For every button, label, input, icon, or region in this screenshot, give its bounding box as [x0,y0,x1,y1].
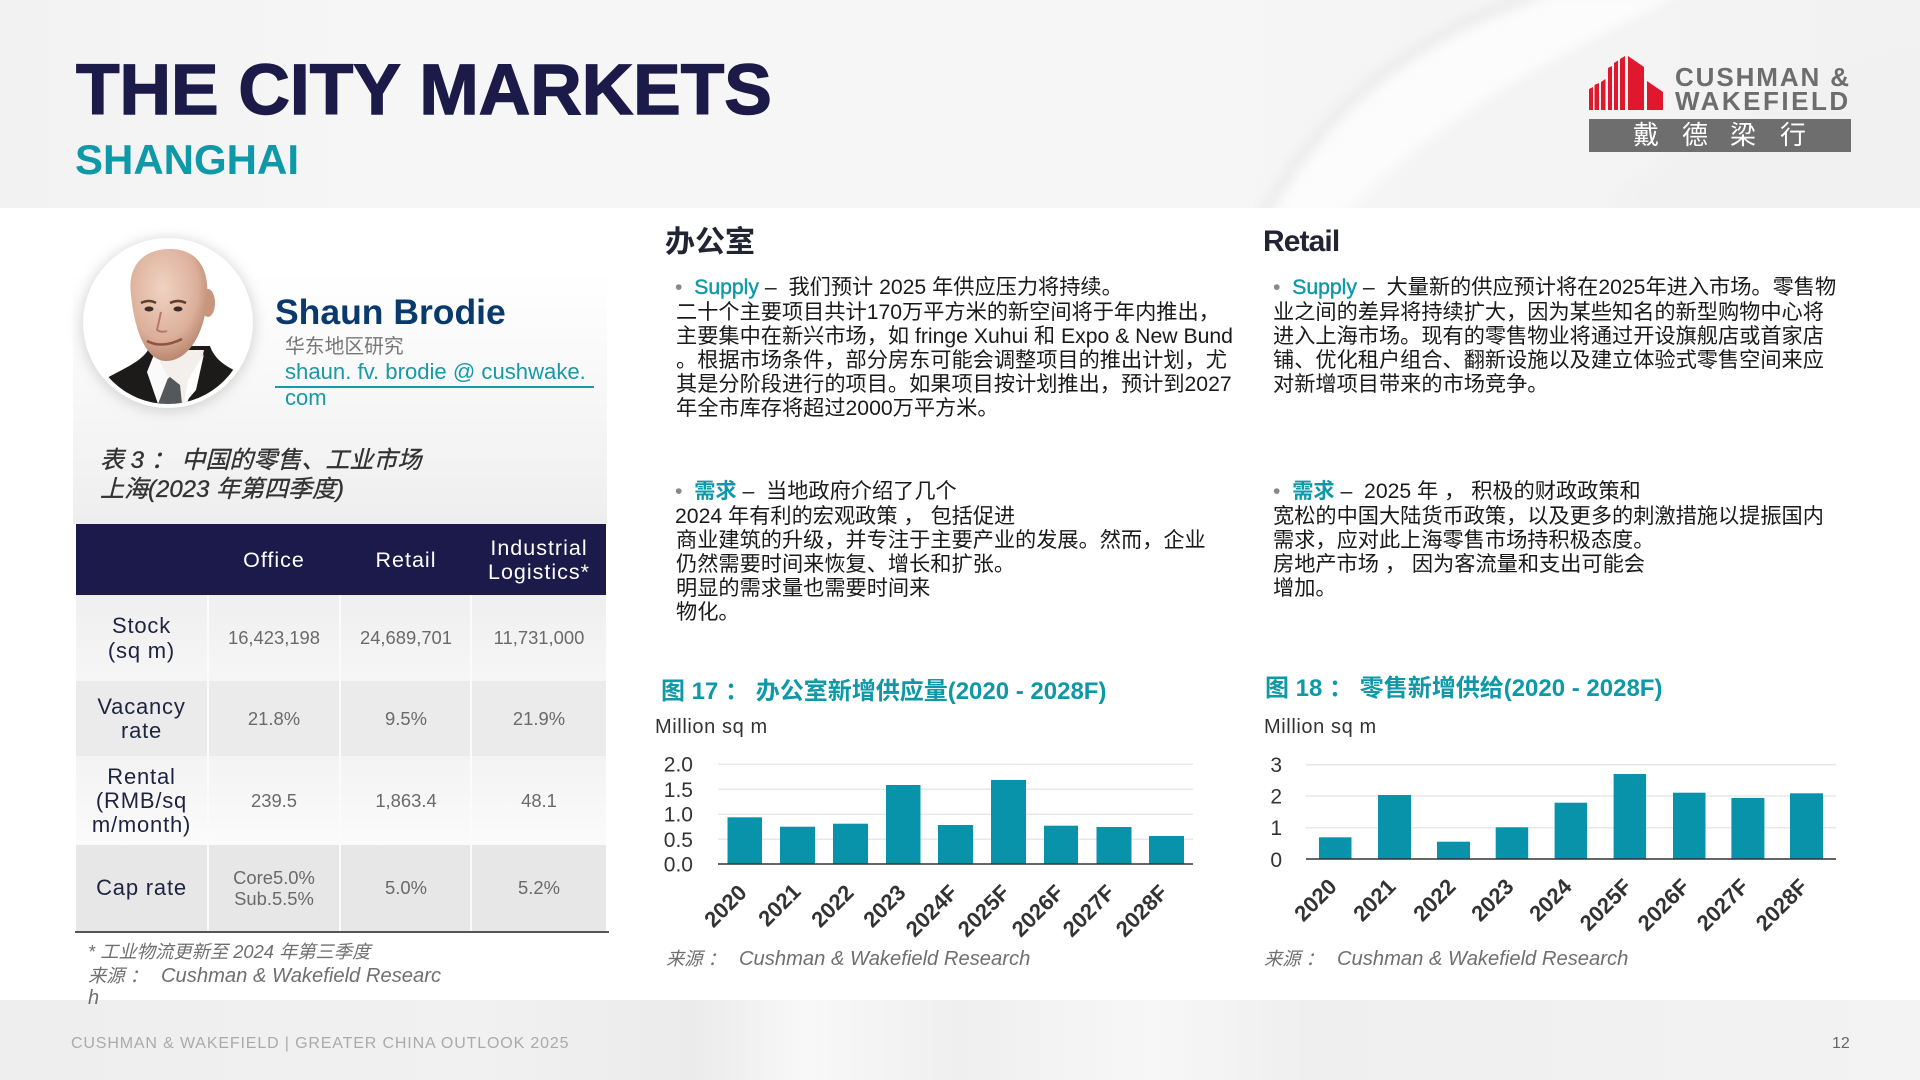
x axis labels: 2022 [806,880,859,932]
table caption [100,447,424,503]
x axis labels: 2021 [753,879,806,931]
table header: Industrial [490,536,588,560]
text block: retail supply: • Supply – 大量新的供应预计将在2025年进入市场。零售物 [1273,276,1836,299]
row: cap rate [76,845,606,931]
text block: office demand [675,480,1206,624]
y axis labels: 3 [1270,754,1282,777]
row: stock: 11,731,000 [494,627,584,648]
text block: office supply: 二十个主要项目共计170万平方米的新空间将于年内推出， [676,300,1220,324]
text block: retail demand: 房地产市场 ， 因为客流量和支出可能会 [1273,553,1645,576]
y axis labels: 2 [1270,786,1282,808]
text block: office demand: • 需求 – 当地政府介绍了几个 [675,480,957,503]
row: cap rate: Sub.5.5% [234,888,314,909]
chart title: figure 18: 图 18 ： 零售新增供给(2020 - 2028F) [1265,675,1662,702]
x axis labels: 2024 [1524,873,1577,926]
icon: red building [1589,56,1663,110]
heading: retail: Retail [1263,225,1339,258]
row: cap rate: Core5.0% [233,866,315,888]
row: rental: 48.1 [521,790,557,811]
x axis labels: 2024F [901,880,963,940]
table footnote and source: h [88,987,99,1009]
text block: retail demand: 增加。 [1273,577,1337,600]
table caption: 表 3 ： 中国的零售、工业市场 [100,447,421,474]
row: rental [76,756,606,845]
table footnote and source: * 工业物流更新至 2024 年第三季度 [88,941,370,962]
row: vacancy rate: 21.9% [513,708,565,729]
x axis labels: 2028F [1751,874,1813,936]
bars [728,780,1184,864]
x axis labels: 2027F [1058,880,1120,940]
chart source: figure 17: 来源 ： Cushman & Wakefield Research [666,948,1030,970]
table footnote and source [88,941,441,1009]
chart title: figure 17: 图 17 ： 办公室新增供应量(2020 - 2028F) [661,678,1106,705]
row: cap rate: Cap rate [96,875,187,900]
row: rental: 1,863.4 [375,790,437,811]
row: vacancy rate [76,681,606,756]
y axis labels: 0.5 [664,829,693,852]
row: cap rate: 5.0% [385,877,427,898]
table footnote and source: 来源 ： Cushman & Wakefield Researc [88,965,441,987]
row: stock: 16,423,198 [228,627,320,648]
row: stock: Stock [112,613,171,638]
x axis labels: 2020 [1289,874,1342,926]
table: market indicators [75,524,609,933]
text block: office demand: 商业建筑的升级，并专注于主要产业的发展。然而，企业 [676,529,1206,552]
text block: office supply [675,276,1233,420]
text block: office supply: 主要集中在新兴市场，如 fringe Xuhui 和 Expo & New Bund [676,324,1233,348]
row: rental: (RMB/sq [96,788,187,813]
text block: office demand: 仍然需要时间来恢复、增长和扩张。 [676,553,1015,576]
table header: Logistics* [488,560,590,584]
x axis labels: 2026F [1633,874,1695,936]
row: rental: Rental [107,764,176,789]
table header [76,524,606,595]
footer text: CUSHMAN & WAKEFIELD | GREATER CHINA OUTLOOK 2025 [71,1035,569,1052]
table header: Office [243,548,305,572]
row: rental: m/month) [92,812,191,837]
row: vacancy rate: 9.5% [385,708,427,729]
heading: office: 办公室 [665,226,755,259]
bars [1319,774,1823,859]
x axis labels: 2025F [1575,874,1637,936]
text block: office demand: 物化。 [676,601,740,624]
text block: office supply: • Supply – 我们预计 2025 年供应压力将持续。 [675,276,1123,299]
x axis labels: 2020 [699,880,752,932]
y axis labels: 1.5 [664,779,693,802]
logo wordmark: CUSHMAN & [1675,62,1851,92]
author name: Shaun Brodie [275,292,506,332]
row: cap rate: 5.2% [518,877,560,898]
y axis labels: 1.0 [664,804,693,826]
text block: retail supply: 对新增项目带来的市场竞争。 [1273,372,1548,396]
x axis labels: 2025F [953,880,1015,940]
text block: retail demand: 需求，应对此上海零售市场持积极态度。 [1273,529,1654,552]
x axis labels: 2023 [1466,874,1519,926]
chart source: figure 18: 来源 ： Cushman & Wakefield Research [1264,948,1628,970]
x axis labels: 2026F [1007,880,1069,940]
y axis labels: 2.0 [664,754,693,776]
text block: office demand: 2024 年有利的宏观政策 ， 包括促进 [675,504,1015,528]
x axis labels: 2027F [1692,874,1754,936]
row: stock: (sq m) [108,638,175,662]
row: vacancy rate: 21.8% [248,708,300,729]
title: THE CITY MARKETS [76,50,772,130]
x axis labels [1289,873,1813,936]
subtitle: SHANGHAI [75,136,299,183]
logo: Cushman & Wakefield [1589,56,1851,152]
y axis labels: 1 [1270,817,1282,840]
chart unit: figure 18: Million sq m [1264,716,1377,738]
portrait photo [76,233,260,416]
row: vacancy rate: rate [121,718,162,743]
text block: office demand: 明显的需求量也需要时间来 [676,577,930,600]
row: rental: 239.5 [251,790,297,811]
logo chinese bar: 梁 [1730,120,1756,150]
y axis labels: 0.0 [664,854,693,876]
text block: retail demand: 宽松的中国大陆货币政策，以及更多的刺激措施以提振国内 [1273,504,1824,528]
y axis labels: 0 [1270,849,1282,872]
x axis labels: 2028F [1111,880,1173,940]
author email: com [285,385,327,410]
logo chinese bar: 戴 [1633,120,1659,150]
author email [275,359,594,410]
x axis labels [699,879,1173,942]
text block: office supply: 年全市库存将超过2000万平方米。 [676,396,999,420]
text block: retail supply: 进入上海市场。现有的零售物业将通过开设旗舰店或首家店 [1273,324,1824,348]
x axis labels: 2022 [1408,874,1461,926]
text block: retail supply: 铺、优化租户组合、翻新设施以及建立体验式零售空间来应 [1273,348,1824,372]
author email: shaun. fv. brodie @ cushwake. [285,359,586,384]
logo chinese bar [1589,119,1851,152]
text block: office supply: 其是分阶段进行的项目。如果项目按计划推出，预计到2027 [676,372,1232,396]
logo chinese bar: 德 [1682,120,1708,150]
text block: retail demand [1273,480,1824,600]
table header: Retail [376,548,436,572]
logo: Cushman & Wakefield: WAKEFIELD [1675,86,1851,116]
bar chart: retail new supply [1270,754,1836,936]
y axis labels [1270,754,1282,872]
table caption: 上海(2023 年第四季度) [100,476,344,503]
row: stock [76,595,606,681]
logo chinese bar: 行 [1780,120,1806,150]
bar chart: office new supply [664,754,1193,940]
chart unit: figure 17: Million sq m [655,716,768,738]
row: vacancy rate: Vacancy [97,694,186,719]
text block: retail demand: • 需求 – 2025 年 ， 积极的财政政策和 [1273,480,1641,503]
x axis labels: 2021 [1348,874,1401,926]
text block: office supply: 。根据市场条件，部分房东可能会调整项目的推出计划，尤 [676,348,1227,372]
page number: 12 [1832,1035,1850,1052]
x axis labels: 2023 [858,880,911,932]
row: stock: 24,689,701 [360,627,452,648]
y axis labels [664,754,693,876]
text block: retail supply: 业之间的差异将持续扩大，因为某些知名的新型购物中心将 [1273,300,1824,324]
text block: retail supply [1273,276,1836,396]
author role: 华东地区研究 [285,336,404,358]
